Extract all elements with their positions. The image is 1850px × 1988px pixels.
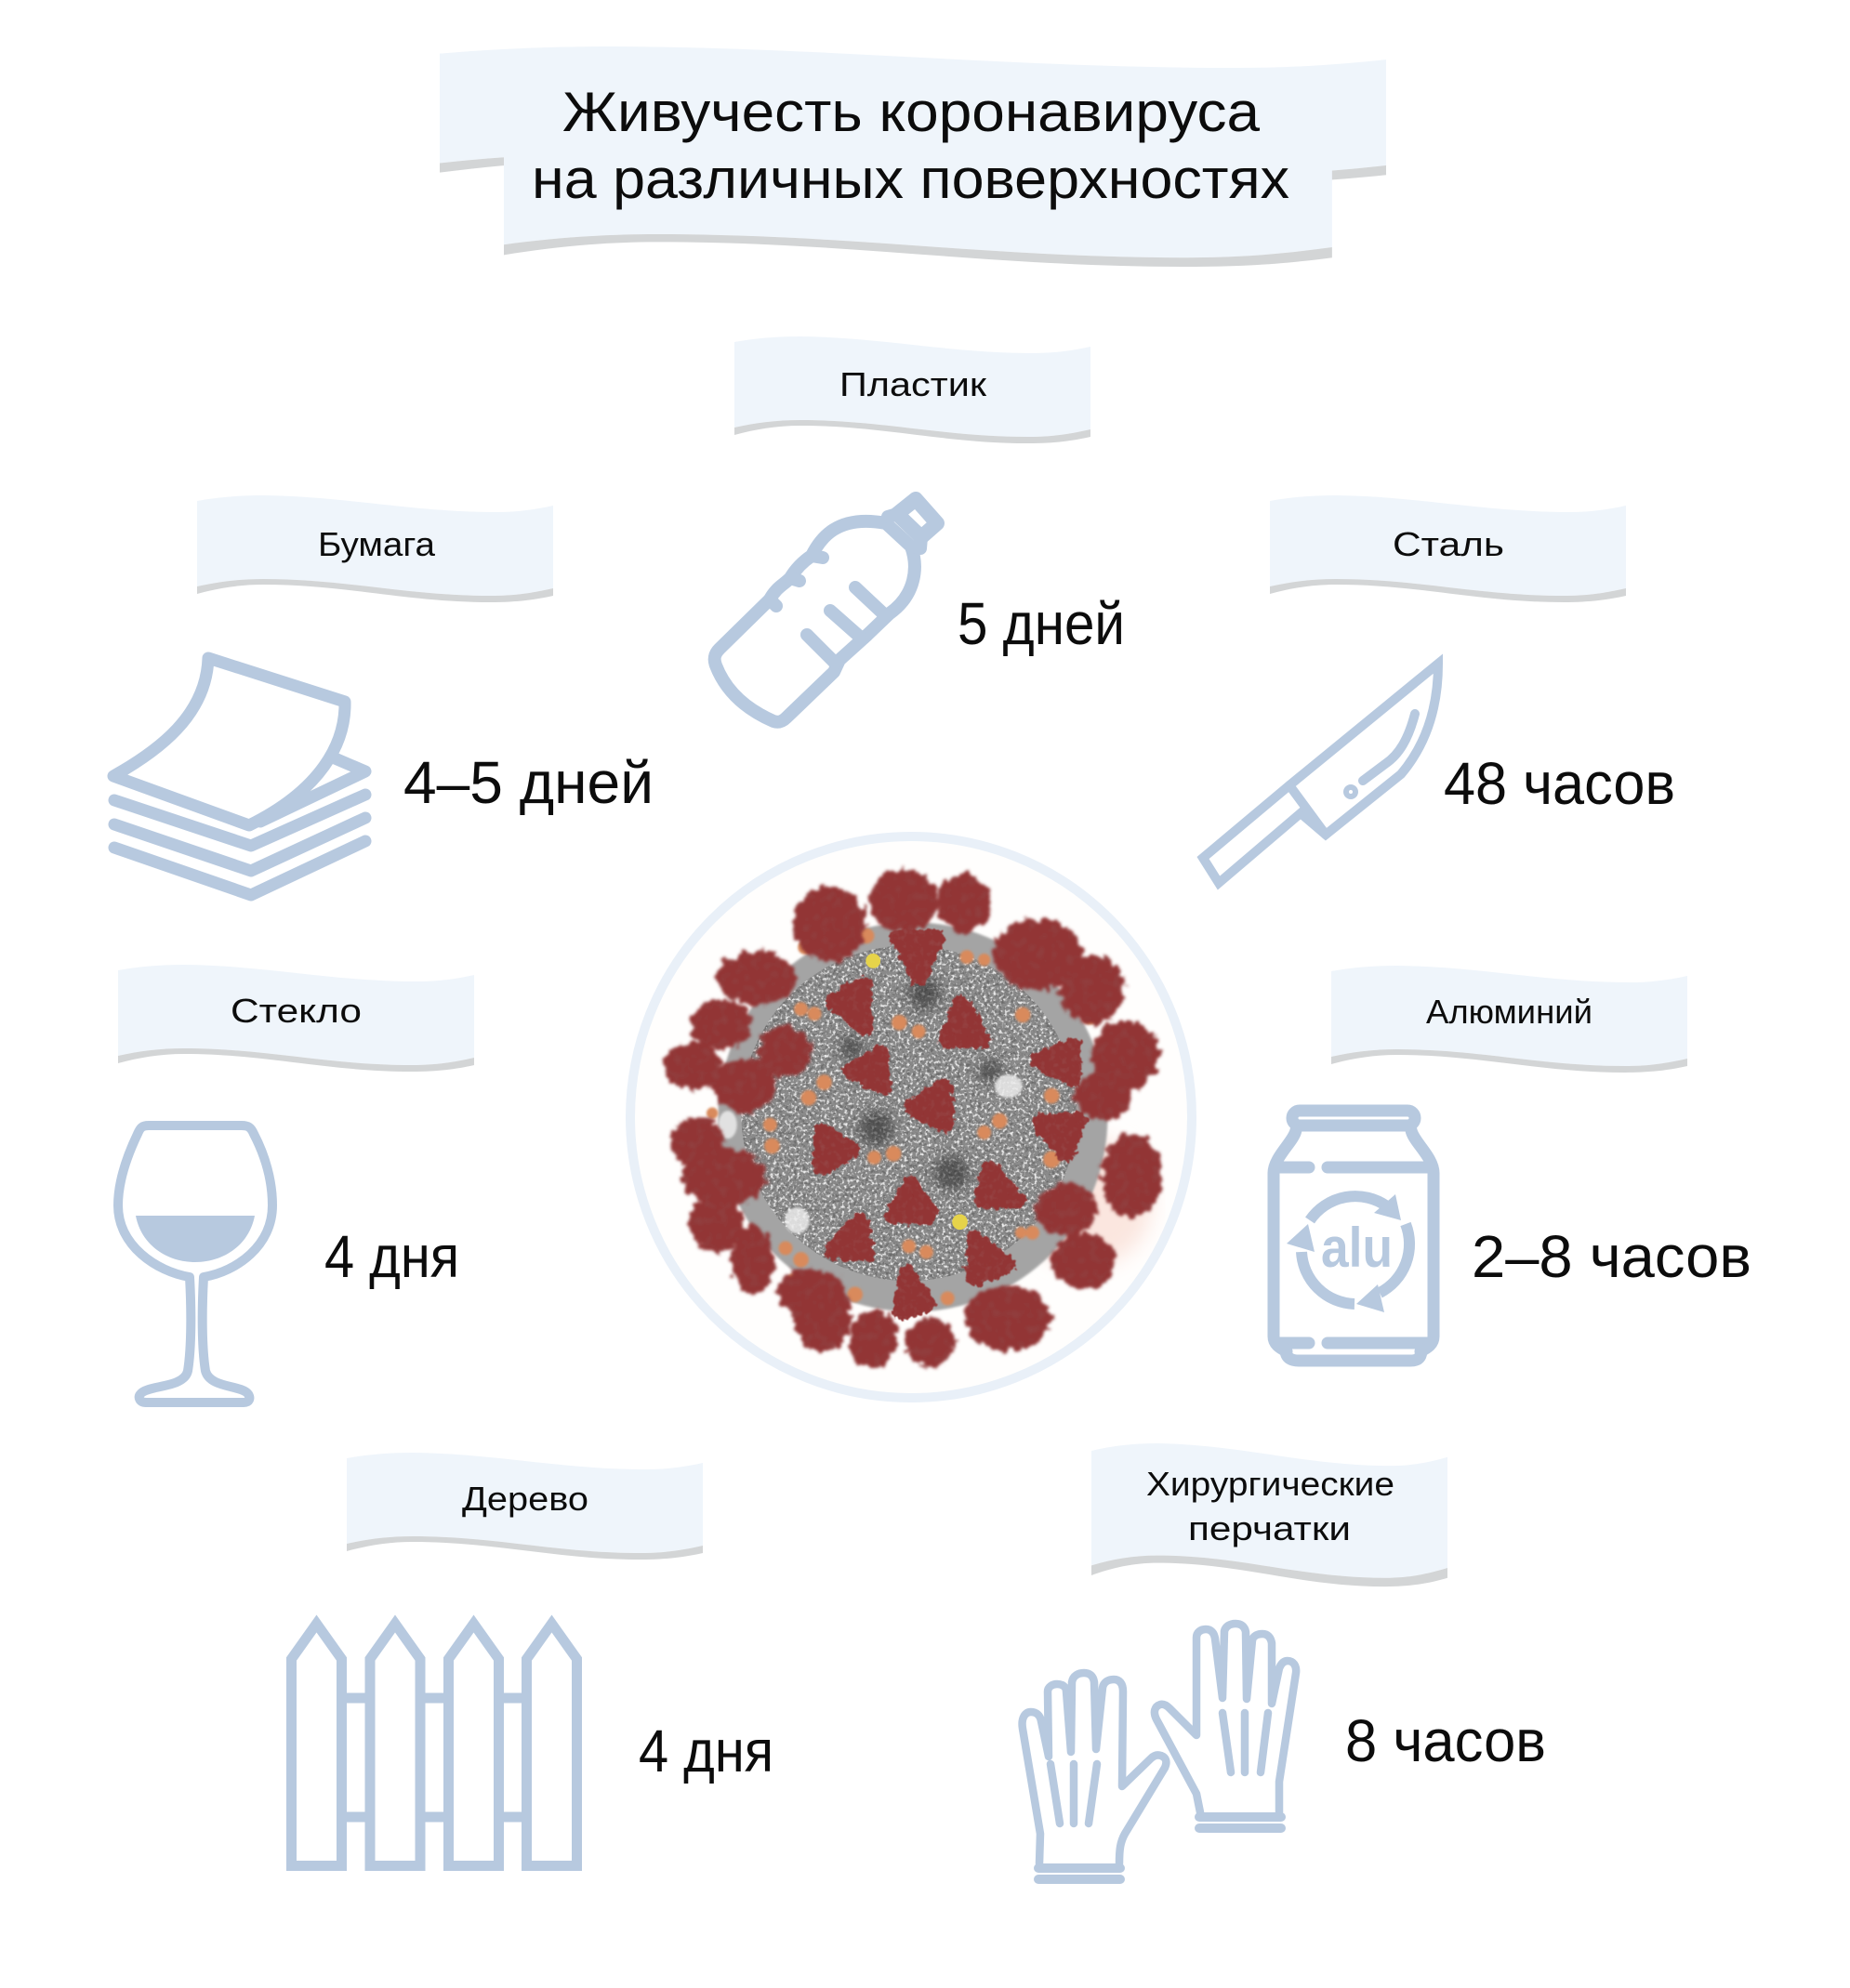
panel: plastic <box>715 336 1125 722</box>
steel ribbon <box>1270 495 1626 602</box>
gloves label line 1: Хирургические <box>1146 1465 1394 1503</box>
coronavirus particle <box>664 870 1162 1368</box>
icon: paper stack <box>113 658 365 895</box>
icon: knife <box>1203 664 1438 883</box>
panel: aluminium <box>1274 966 1751 1361</box>
paper value: 4–5 дней <box>403 749 654 816</box>
icon: fence <box>292 1624 576 1866</box>
wood ribbon <box>347 1453 703 1560</box>
icon: bottle <box>715 499 937 722</box>
panel: wood <box>292 1453 773 1866</box>
steel label: Сталь <box>1393 525 1504 563</box>
plastic value: 5 дней <box>958 590 1125 657</box>
virus illustration <box>630 836 1192 1398</box>
aluminium label: Алюминий <box>1426 993 1592 1031</box>
paper ribbon <box>197 495 553 602</box>
gloves label line 2: перчатки <box>1188 1509 1351 1547</box>
plastic label: Пластик <box>839 365 986 403</box>
plastic ribbon <box>734 336 1090 443</box>
glass ribbon <box>118 965 474 1072</box>
title <box>440 46 1386 267</box>
icon: aluminium can: alu <box>1321 1217 1393 1279</box>
title line 1: Живучесть коронавируса <box>562 81 1261 143</box>
gloves value: 8 часов <box>1345 1707 1546 1774</box>
title line 2: на различных поверхностях <box>532 148 1289 210</box>
icon: aluminium can <box>1274 1111 1434 1361</box>
ring around virus <box>630 836 1192 1398</box>
panel: gloves <box>1023 1443 1546 1879</box>
paper label: Бумага <box>318 525 436 563</box>
panel: glass <box>118 965 474 1402</box>
aluminium ribbon <box>1331 966 1687 1073</box>
glass value: 4 дня <box>324 1223 459 1290</box>
wood label: Дерево <box>462 1480 588 1518</box>
wood value: 4 дня <box>639 1718 773 1784</box>
panel: steel <box>1203 495 1675 883</box>
title ribbon: lower <box>504 117 1332 267</box>
gloves ribbon <box>1091 1443 1447 1586</box>
glass label: Стекло <box>231 992 362 1030</box>
icon: wine glass <box>118 1126 272 1402</box>
title ribbon: upper <box>440 46 1386 183</box>
aluminium value: 2–8 часов <box>1472 1223 1751 1290</box>
steel value: 48 часов <box>1444 750 1675 817</box>
panel: paper <box>113 495 654 895</box>
icon: gloves <box>1023 1624 1296 1879</box>
